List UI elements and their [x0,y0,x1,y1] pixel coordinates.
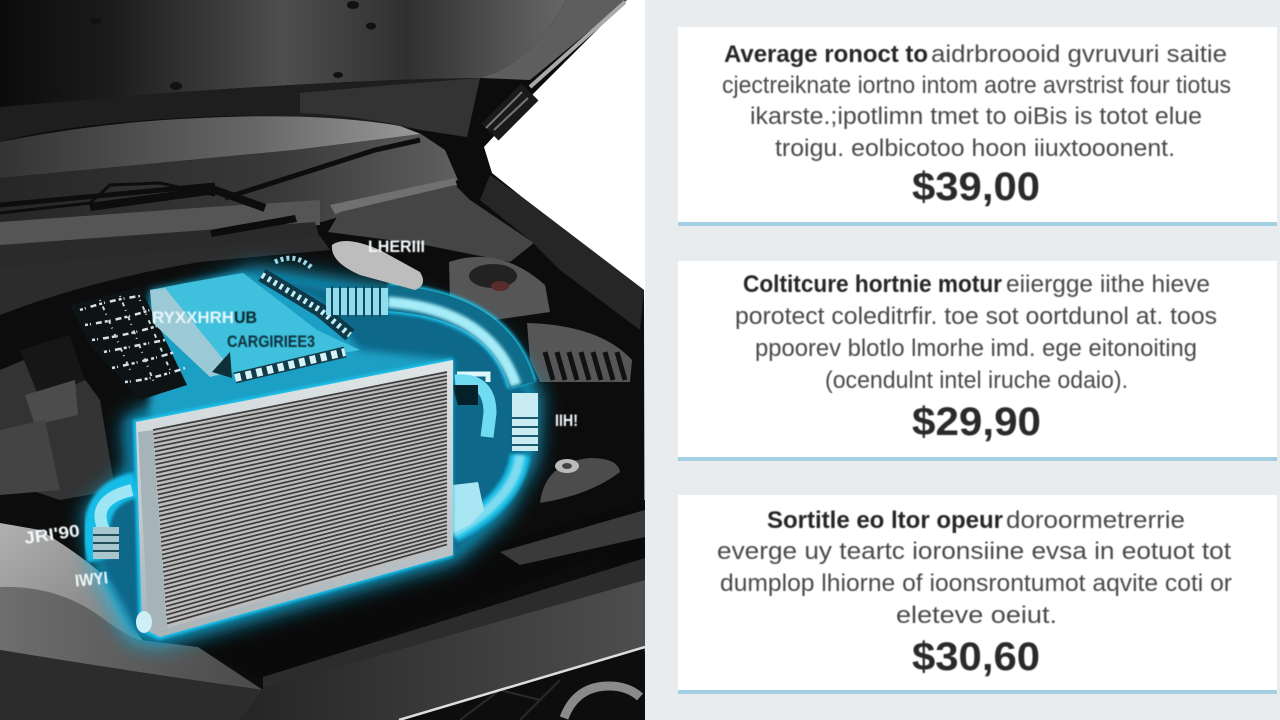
label: lower left: IWYI [74,568,109,591]
hose: right main [388,298,522,533]
component labels [23,237,578,591]
card 3 description: doroormetrerrie [1006,507,1185,534]
left engine covers [0,335,115,500]
label: left hose: JRI'90 [23,521,81,548]
hose: right inner [452,374,490,437]
hose coupling: left [93,527,119,559]
notch [597,538,645,568]
open hood underside [0,0,627,142]
speckled engine shadow [70,287,187,400]
label: engine top: RYXXHRH [152,308,234,327]
upper bay surround [0,236,330,315]
hood strut [486,2,625,132]
card 3 [678,495,1277,694]
card 1 description: aidrbroooid gvruvuri saitie [931,41,1227,68]
card 1 description: Average ronoct to [724,41,928,68]
cowl panel [0,134,458,250]
front grille [412,652,645,720]
card 2 description [735,271,1217,394]
left fender lower [0,650,263,720]
hose coupling: top [326,286,388,317]
card 1 description [722,41,1231,162]
label: right hose: IIH! [555,411,578,430]
card 3 description: Sortitle eo ltor opeur [767,507,1003,534]
card 2 description: ppoorev blotlo lmorhe imd. ege eitonoiting [755,335,1197,362]
engine block [150,258,360,378]
black trench below radiator [165,500,645,680]
windshield reflection [0,116,421,178]
radiator fins [153,372,447,624]
card 1 [678,27,1277,226]
label: engine top dark part: UB [234,308,257,327]
blue glow [85,268,540,645]
card 3 description [717,507,1232,629]
page background [645,0,1280,720]
coolant reservoir [332,241,423,290]
dark stripe [263,558,645,688]
chrome bumper line [399,647,645,720]
card 1 description: cjectreiknate iortno intom aotre avrstrist four tiotus [722,72,1231,99]
card 3 description: dumplop lhiorne of ioonsrontumot aqvite coti or [720,570,1232,597]
right fender panel [328,185,534,262]
right body edge [480,175,644,330]
label: reservoir: LHERIII [368,237,425,256]
panel: car engine bay illustration [0,0,645,720]
radiator [133,358,453,640]
radiator corner bolt [136,611,152,633]
upper right panel [500,510,645,565]
radiator fin core [153,372,447,628]
card 2 description: (ocendulnt intel iruche odaio). [825,367,1128,394]
card 3 price: $30,60 [912,635,1040,679]
card 3 description: everge uy teartc ioronsiine evsa in eotuot tot [717,538,1231,565]
left fender mid band [0,587,263,690]
left fender light band [0,523,150,650]
windshield wipers [0,140,420,213]
card 2 description: Coltitcure hortnie motur [743,271,1002,298]
card 1 description: ikarste.;ipotlimn tmet to oiBis is totot elue [750,103,1202,130]
card 1 description: troigu. eolbicotoo hoon iiuxtooonent. [775,135,1175,162]
label: engine lower: CARGIRIEE3 [227,332,315,351]
hood front lip [240,580,645,720]
hose coupling: right [510,393,538,451]
card 1 price: $39,00 [912,165,1040,209]
card 2 description: eiiergge iithe hieve [1006,271,1210,298]
hose: left [97,485,136,560]
car body silhouette [0,0,645,720]
card 2 [678,261,1277,461]
right engine parts [449,257,632,503]
cowl trim strips [0,178,457,268]
card 2 price: $29,90 [912,400,1041,444]
panel: right column cards [678,27,1277,694]
radiator left side frame [138,430,167,628]
card 3 description: eletevе oeiut. [896,602,1057,629]
white backdrop behind car [0,0,645,720]
card 2 description: porotect coleditrfir. toe sot oortdunol at. toos [735,303,1217,330]
bracket: right lower [453,482,484,533]
